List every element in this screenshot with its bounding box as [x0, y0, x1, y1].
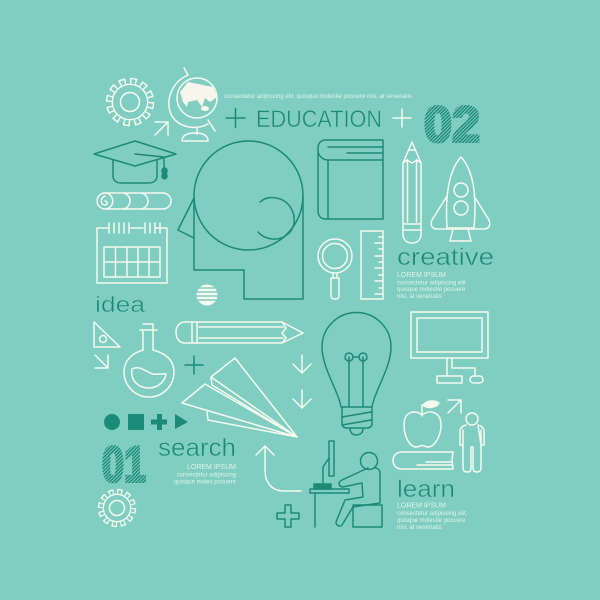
icon: ruler [361, 231, 383, 299]
heading: learn: learn [397, 476, 455, 503]
icon: rocket [431, 157, 490, 241]
icon: apple [404, 401, 441, 447]
text block: learn: LOREM IPSUM [397, 502, 446, 510]
icon: arrow up-right [155, 122, 168, 135]
icon: vertical pencil [403, 142, 421, 243]
icon: arrow up-right small [448, 400, 461, 413]
icon: striped ball [196, 284, 218, 306]
icon: curved arrow up [256, 446, 301, 491]
text block: search: LOREM IPSUM [187, 464, 236, 471]
icon: outlined plus [277, 505, 299, 527]
icon: head profile [178, 141, 303, 299]
top caption: consectetur adipiscing elit, quisque molestie posuere nisi, at venenatis [224, 94, 412, 100]
icon: set square [94, 322, 120, 347]
icon: standing person [460, 413, 484, 472]
text block: learn: consectetur adipiscing elit, [397, 511, 468, 517]
icon: horizontal pencil [176, 322, 303, 343]
icon: light bulb [322, 312, 391, 435]
icon: small book [393, 452, 453, 469]
icon: magnifier [318, 239, 352, 299]
heading: creative: creative [397, 244, 494, 271]
text block: search: consectetur adipiscing [177, 472, 236, 478]
icon: paper plane [182, 358, 297, 437]
text block: learn: nisi, at venenatis [397, 525, 442, 531]
number 02: 02 [424, 96, 480, 152]
icon: calendar [97, 223, 167, 283]
icon: book [318, 140, 383, 219]
plus: right of title [393, 109, 411, 127]
icon: graduation cap [94, 141, 176, 183]
icon: flask [124, 324, 174, 397]
icon: globe [169, 68, 217, 141]
title: EDUCATION [256, 106, 382, 133]
text block: creative: quisque molestie posuere [397, 287, 466, 293]
text block: learn [397, 502, 468, 531]
text block: search: quisque moles posuere [174, 480, 237, 486]
text block: creative: nisi, at venenatis [397, 294, 442, 300]
icon: scroll [97, 193, 171, 209]
heading: idea: idea [95, 292, 146, 317]
text block: search [174, 464, 237, 486]
icon: arrow down-right [95, 355, 108, 368]
text block: creative: consectetur adipiscing elit [397, 280, 466, 286]
text block: learn: quisque molestie posuere [397, 518, 466, 524]
number 01: 01 [102, 436, 146, 492]
icon: small gear [101, 492, 133, 524]
plus: left of title [226, 108, 245, 128]
icon: down arrows [293, 355, 311, 408]
heading: search: search [158, 434, 236, 462]
plus: dark centre [185, 356, 203, 374]
icon: person at desk [310, 441, 382, 527]
icon: computer monitor [411, 312, 488, 383]
icons: dark solid shapes [104, 414, 188, 430]
text block: creative [397, 272, 466, 300]
text block: creative: LOREM IPSUM [397, 272, 446, 279]
icon: large gear [110, 82, 150, 122]
